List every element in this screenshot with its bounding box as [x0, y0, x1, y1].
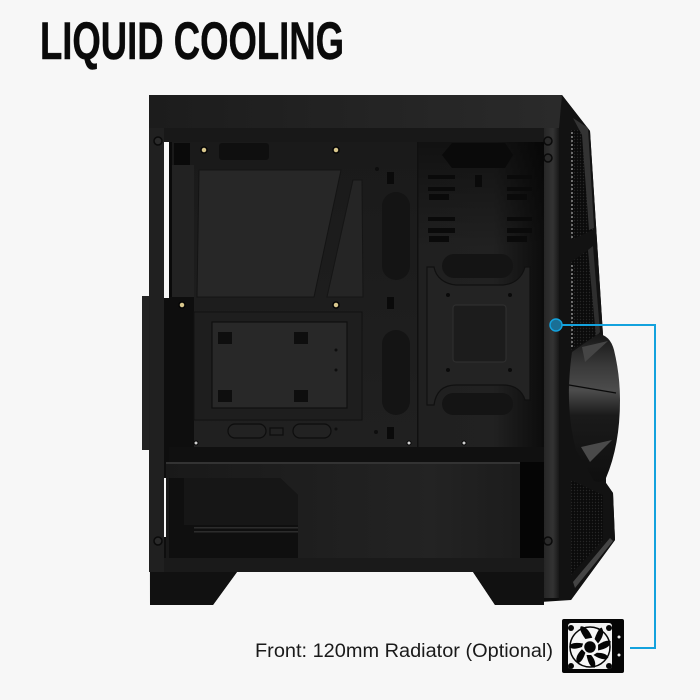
gold standoffs [179, 147, 339, 308]
square holes [218, 167, 379, 434]
callout dot [550, 319, 562, 331]
mounting plate [427, 267, 530, 405]
plate holes [446, 293, 512, 372]
base band [164, 558, 544, 572]
middle trim [588, 246, 600, 337]
PSU shroud [166, 462, 544, 558]
triangular recess [327, 180, 363, 297]
CPU backplate inner [212, 322, 347, 408]
fan [569, 334, 620, 482]
upper handle oval [442, 254, 513, 278]
middle mesh [571, 250, 598, 350]
tray screws [194, 441, 466, 445]
vertical ovals [382, 192, 410, 415]
top band [149, 128, 545, 142]
radiator mount recess [197, 170, 341, 297]
case silhouette [149, 95, 615, 605]
motherboard tray left [169, 142, 418, 448]
top cutout [219, 143, 269, 160]
horizontal ovals [228, 424, 331, 438]
lower handle oval [442, 393, 513, 415]
CPU backplate frame [194, 312, 362, 420]
plate centre square [453, 305, 506, 362]
front panel [559, 95, 615, 600]
small slots [387, 172, 394, 439]
white mesh beads [571, 132, 573, 348]
callout line [562, 325, 655, 648]
shroud cutout [169, 478, 298, 558]
fan blades [569, 385, 616, 393]
white gaps through case [164, 142, 169, 537]
cable strip [169, 447, 544, 462]
top fan cutout [442, 143, 513, 168]
upper light trim [573, 118, 594, 230]
motherboard tray right [194, 142, 544, 448]
corner screws [154, 137, 552, 545]
lower mesh [571, 480, 603, 575]
callout [550, 319, 655, 648]
label: Front: 120mm Radiator (Optional) [255, 641, 553, 662]
left pillar [149, 128, 164, 572]
foot [150, 572, 544, 605]
PC case [142, 95, 620, 605]
icon: radiator [562, 619, 624, 673]
title: LIQUID COOLING [40, 12, 344, 71]
case left side protrusion [142, 296, 150, 450]
shroud side void [520, 462, 544, 558]
lower trim [573, 538, 613, 588]
ventilation slots [428, 175, 532, 242]
cutout slats [194, 527, 298, 532]
upper mesh [571, 130, 593, 240]
right pillar [544, 128, 559, 598]
top panel [149, 95, 562, 128]
